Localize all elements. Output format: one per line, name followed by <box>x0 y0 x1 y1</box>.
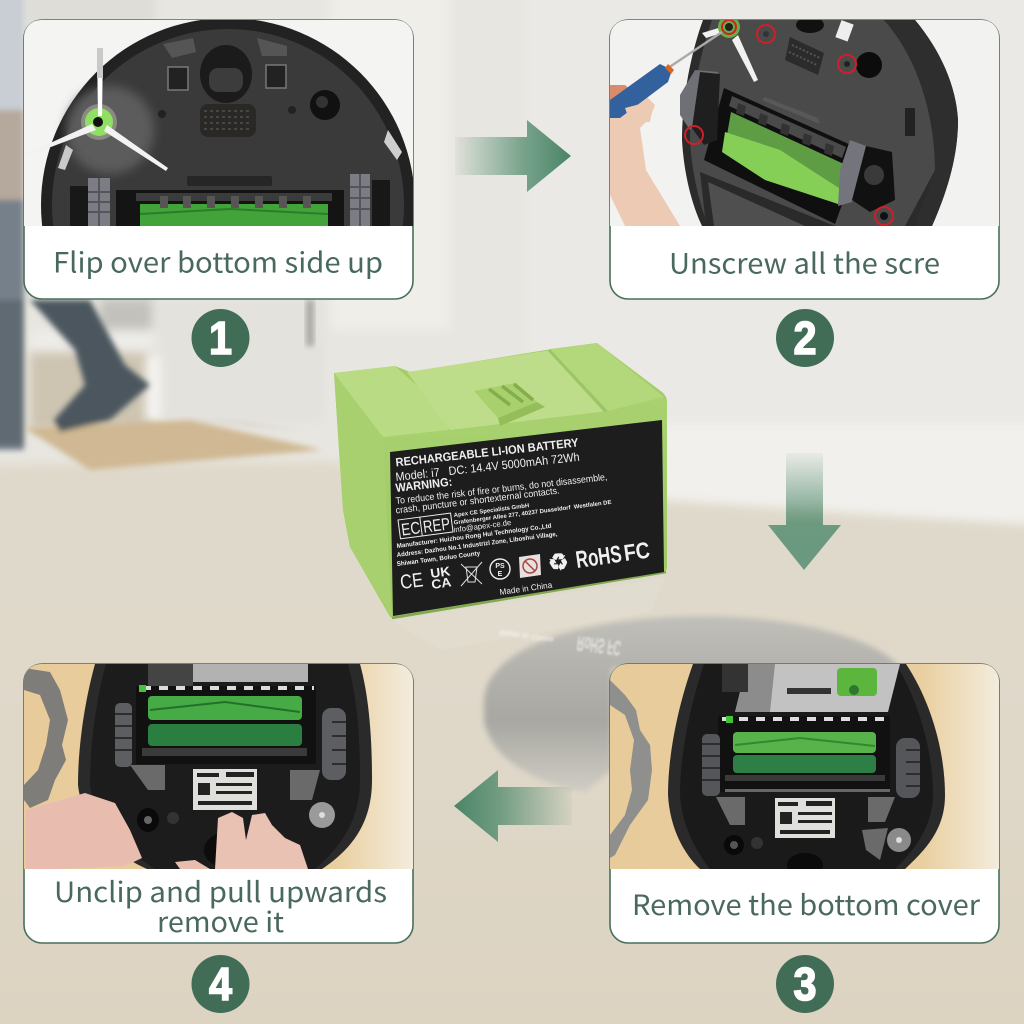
lower details <box>724 835 744 855</box>
robot body <box>682 20 958 226</box>
EC REP mark: EC <box>400 518 421 540</box>
label text: To reduce the risk of fire or burns, do not disassemble, <box>395 472 608 507</box>
background robot ghost <box>484 616 900 792</box>
loose cover <box>610 680 652 858</box>
bin assembly <box>735 664 900 712</box>
certification marks: E <box>498 571 503 578</box>
arrow right <box>455 120 571 192</box>
hands <box>26 793 142 869</box>
photo: screwing <box>610 16 999 226</box>
label text: info@apex-ce.de <box>453 518 512 534</box>
reflection <box>393 578 665 659</box>
battery label <box>193 769 257 810</box>
photo: pull upward <box>24 664 413 869</box>
wheels <box>88 178 110 226</box>
red screw markers <box>685 20 893 225</box>
wheels <box>115 703 132 767</box>
label text: Made in China <box>499 580 553 597</box>
label text: RECHARGEABLE LI-ION BATTERY <box>395 435 579 469</box>
panel 3: remove cover <box>610 664 999 943</box>
arrow left <box>454 770 572 842</box>
certification marks: PS <box>495 563 505 570</box>
caption 3: Remove the bottom cover <box>632 884 980 924</box>
badge 3: 3 <box>793 959 817 1011</box>
certification marks <box>399 537 651 594</box>
right tab <box>550 343 664 411</box>
bottom edge <box>392 572 666 618</box>
screwdriver <box>668 32 722 68</box>
badge 2 <box>776 309 834 367</box>
caption 2: Unscrew all the scre <box>669 242 940 282</box>
hand <box>610 90 680 226</box>
dust bin <box>700 172 835 226</box>
brush housing <box>187 176 272 186</box>
label text: Manufacturer: Huizhou Rong Hui Technology Co.,Ltd <box>396 523 552 550</box>
certification marks: CA <box>430 574 453 592</box>
center plateau <box>407 350 608 430</box>
badge 4: 4 <box>209 959 233 1011</box>
badge 1: 1 <box>209 313 232 365</box>
panel 4: unclip: remove it <box>157 901 284 941</box>
battery product <box>334 343 667 659</box>
label text: crash, puncture or shortexternal contacts. <box>395 485 560 516</box>
brush bay <box>136 686 316 764</box>
sensor <box>310 90 340 120</box>
certification marks: CE <box>399 569 424 594</box>
reflection: Made in China <box>499 628 555 645</box>
side face <box>334 373 392 617</box>
wheels <box>702 734 720 796</box>
floor grille <box>200 104 256 137</box>
caption 1: Flip over bottom side up <box>53 242 383 282</box>
panel 1: flip over <box>23 19 414 300</box>
side brush <box>50 48 168 171</box>
reflection: RoHS FC <box>576 631 622 659</box>
brush bay <box>718 716 890 792</box>
label text: Apex CE Specialists GmbH <box>453 503 530 519</box>
label text: Grafenberger Allee 277, 40237 Dusseldorf Westfalen DE <box>453 500 612 526</box>
black label <box>390 420 664 616</box>
wheels <box>680 70 718 130</box>
label text: WARNING: <box>395 475 453 495</box>
latch <box>474 383 545 426</box>
gray brackets <box>716 797 745 825</box>
left shoulder <box>334 366 453 437</box>
grille <box>785 37 824 75</box>
EC REP mark: REP <box>422 514 451 537</box>
bin assembly <box>193 664 308 682</box>
caster wheel <box>200 45 252 103</box>
panel 2: unscrew <box>610 16 999 299</box>
label text: Shiwan Town, Boluo County <box>396 550 481 568</box>
badge 4 <box>192 955 250 1013</box>
brush bay <box>704 88 862 224</box>
bumpers <box>384 130 402 160</box>
photo: robot underside <box>24 20 413 226</box>
battery body <box>334 343 667 618</box>
loose cover <box>24 668 68 808</box>
side brush arm <box>732 35 758 82</box>
EC REP mark <box>398 513 453 540</box>
gray brackets <box>130 765 165 790</box>
badge 1 <box>192 309 250 367</box>
label text: Address: Dazhou No.1 Industrizl Zone, Liboshui Village, <box>396 531 558 559</box>
arrow down <box>768 453 841 570</box>
certification marks: FC <box>622 537 651 566</box>
badge 3 <box>776 955 834 1013</box>
certification marks: RoHS <box>574 541 623 574</box>
certification marks: UK <box>429 563 452 581</box>
panel 4: unclip <box>24 664 413 943</box>
photo: cover off <box>610 664 999 877</box>
certification marks: ♻ <box>548 549 569 575</box>
label text: Model: i7 DC: 14.4V 5000mAh 72Wh <box>395 450 580 484</box>
caption 4: Unclip and pull upwards <box>54 871 387 911</box>
label text <box>395 435 612 597</box>
battery label in robot <box>775 798 835 838</box>
badge 2: 2 <box>793 313 817 365</box>
front face <box>383 397 667 617</box>
